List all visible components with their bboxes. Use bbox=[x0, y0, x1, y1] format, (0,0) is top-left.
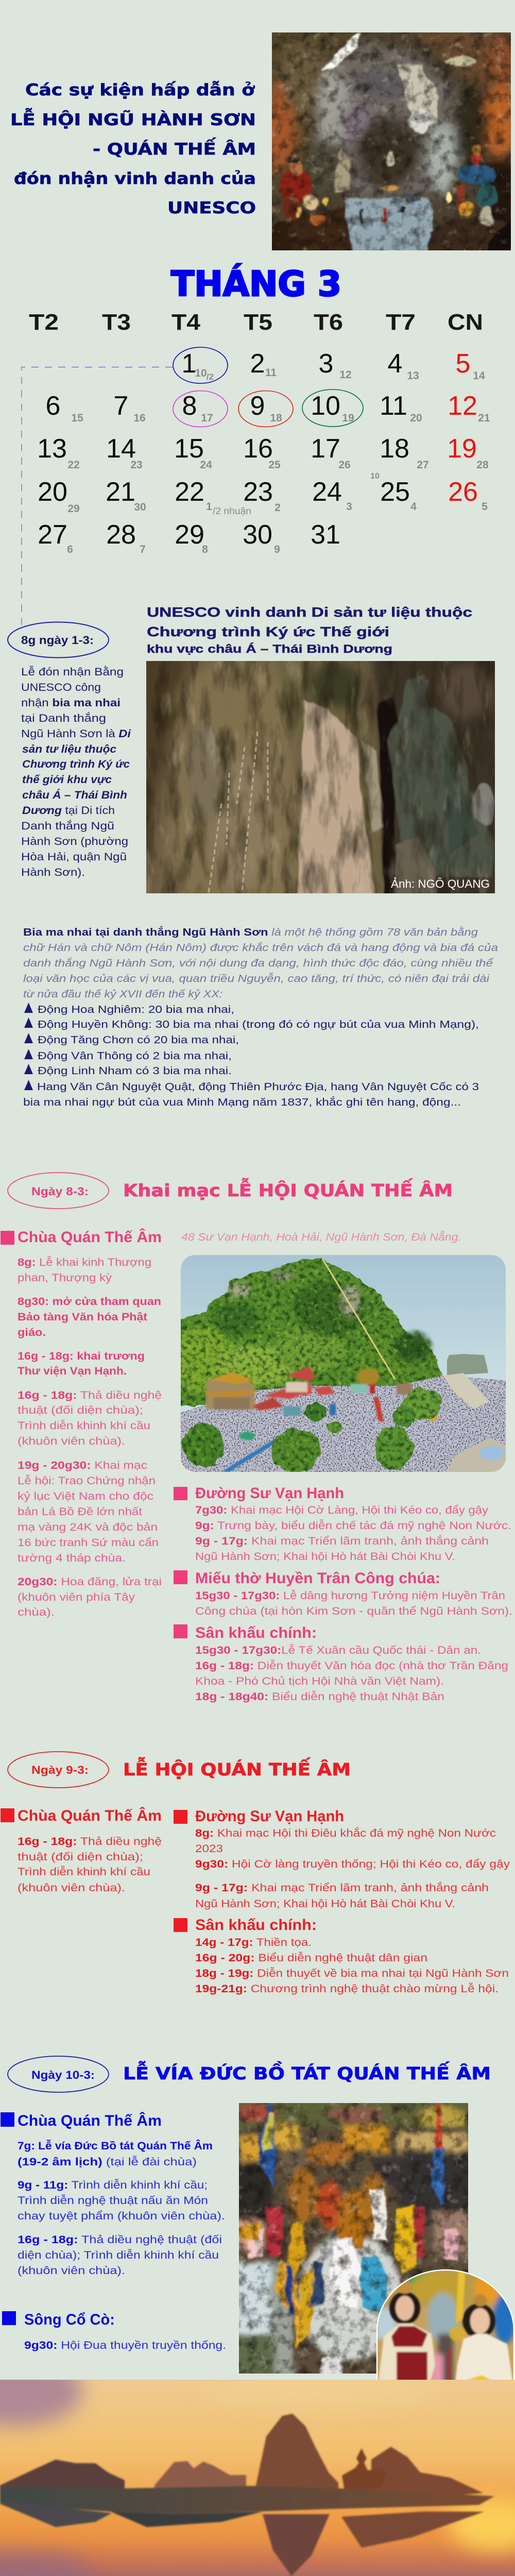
column: Chùa Quán Thế Âm: bản Lá Bồ Đề lớn nhất bbox=[18, 1506, 142, 1518]
text block: ceremony bbox=[21, 666, 131, 878]
solar dates: 9 bbox=[250, 391, 265, 421]
solar dates: 18 bbox=[380, 434, 409, 464]
panel: day 9-3 bbox=[1, 1752, 510, 1995]
weekday header bbox=[29, 310, 483, 335]
column: Chùa Quán Thế Âm: 16g - 18g: Thả diều nghệ thuật (đối bbox=[18, 2234, 222, 2246]
date badge: 8g ngày 1-3: bbox=[21, 634, 94, 647]
column: Đường Sư Vạn Hạnh and stages: 7g30: Khai mạc Hội Cờ Làng, Hội thi Kéo co, đẩy gậy bbox=[195, 1504, 489, 1516]
column: Đường Sư Vạn Hạnh and main stage: Đường Sư Vạn Hạnh bbox=[195, 1808, 344, 1825]
heading: UNESCO honours: UNESCO vinh danh Di sản tư liệu thuộc bbox=[147, 604, 472, 620]
column: Đường Sư Vạn Hạnh and main stage: 18g - 19g: Diễn thuyết về bia ma nhai tại Ngũ Hành Sơn bbox=[195, 1968, 509, 1979]
solar dates: 3 bbox=[319, 349, 333, 379]
text block: bia ma nhai description: Động Vân Thông có 2 bia ma nhai, bbox=[38, 1050, 232, 1062]
column: Chùa Quán Thế Âm: Bảo tàng Văn hóa Phật bbox=[18, 1311, 147, 1323]
column: Đường Sư Vạn Hạnh and stages: 15g30 - 17g30: Lễ Tế Xuân cầu Quốc thái - Dân an. bbox=[195, 1645, 481, 1656]
column: Chùa Quán Thế Âm: (khuôn viên chùa). bbox=[18, 1435, 125, 1447]
lunar dates bbox=[67, 367, 490, 555]
column: Đường Sư Vạn Hạnh and stages: Đường Sư Vạn Hạnh bbox=[195, 1485, 344, 1502]
lunar dates: 18 bbox=[270, 412, 282, 424]
photo: inset of two women bbox=[376, 2269, 515, 2380]
text block: bia ma nhai description: Động Linh Nham có 3 bia ma nhai. bbox=[38, 1065, 232, 1077]
heading: UNESCO honours: Chương trình Ký ức Thế giới bbox=[147, 624, 389, 639]
lunar dates: 3 bbox=[346, 501, 352, 513]
column: Đường Sư Vạn Hạnh and main stage: Sân khấu chính: bbox=[195, 1917, 317, 1934]
heading: UNESCO honours: khu vực châu Á – Thái Bình Dương bbox=[147, 642, 392, 655]
lunar dates: 27 bbox=[417, 459, 429, 471]
solar dates: 30 bbox=[243, 520, 272, 550]
column: Đường Sư Vạn Hạnh and stages: Sân khấu chính: bbox=[195, 1624, 317, 1641]
text block: bia ma nhai description: Bia ma nhai tại danh thắng Ngũ Hành Sơn là một hệ thống gồm 78 văn bản bằng bbox=[23, 926, 478, 938]
lunar dates: 11 bbox=[265, 367, 277, 379]
lunar dates: 30 bbox=[134, 501, 146, 513]
weekday header: CN bbox=[448, 310, 483, 335]
text block: ceremony: thế giới khu vực bbox=[22, 774, 112, 786]
solar dates: 17 bbox=[311, 434, 340, 464]
text block: bia ma nhai description: danh thắng Ngũ Hành Sơn, với nội dung đa dạng, hình thức độc đáo, cùng nhiều thể bbox=[23, 957, 493, 969]
photo: mountain and festival crowd bbox=[173, 1255, 511, 1477]
column: Đường Sư Vạn Hạnh and main stage: 8g: Khai mạc Hội thi Điêu khắc đá mỹ nghệ Non Nước bbox=[195, 1827, 496, 1839]
highlighted date circles bbox=[173, 347, 363, 427]
title: UNESCO bbox=[167, 199, 256, 217]
panel: 1-3 event bbox=[8, 604, 510, 909]
text block: ceremony: sản tư liệu thuộc bbox=[22, 743, 116, 755]
column: Chùa Quán Thế Âm: 19g - 20g30: Khai mạc bbox=[18, 1460, 147, 1471]
title: Các sự kiện hấp dẫn ở bbox=[25, 81, 255, 99]
solar dates: 28 bbox=[106, 520, 136, 550]
column: Chùa Quán Thế Âm: 16 bức tranh Sứ màu cẩn bbox=[18, 1537, 159, 1549]
month heading: THÁNG 3 bbox=[171, 263, 341, 304]
lunar dates: 7 bbox=[140, 544, 146, 555]
column: Chùa Quán Thế Âm: diện chùa); Trình diễn khinh khí cầu bbox=[18, 2249, 219, 2261]
text block: ceremony: Danh thắng Ngũ bbox=[21, 820, 114, 832]
column: Đường Sư Vạn Hạnh and main stage: 9g30: Hội Cờ làng truyền thống; Hội thi Kéo co, đẩy gậy bbox=[195, 1858, 510, 1870]
lunar dates: 14 bbox=[473, 370, 485, 382]
photo credit: Ảnh: NGÔ QUANG bbox=[391, 877, 490, 890]
column: Chùa Quán Thế Âm: chay tuyệt phẩm (khuôn viên chùa). bbox=[18, 2210, 225, 2222]
lunar dates: 22 bbox=[67, 459, 80, 471]
calendar bbox=[29, 310, 490, 555]
column: Đường Sư Vạn Hạnh and stages: 9g - 17g: Khai mạc Triển lãm tranh, ảnh thắng cảnh bbox=[195, 1535, 489, 1547]
text block: bia ma nhai description: từ nửa đầu thế kỷ XVII đến thế kỷ XX: bbox=[23, 989, 222, 1000]
heading: Khai mạc LỄ HỘI QUÁN THẾ ÂM bbox=[123, 1178, 453, 1200]
column: Chùa Quán Thế Âm: thuật (đối diện chùa); bbox=[18, 1404, 143, 1416]
column: Đường Sư Vạn Hạnh and stages: Ngũ Hành Sơn; Khai hội Hò hát Bài Chòi Khu V. bbox=[195, 1551, 455, 1563]
column: Chùa Quán Thế Âm: mạ vàng 24K và độc bản bbox=[18, 1521, 158, 1533]
text block: bia ma nhai description: bia ma nhai ngự bút của vua Minh Mạng năm 1837, khắc ghi tên hang, động... bbox=[23, 1096, 461, 1108]
column: Đường Sư Vạn Hạnh and main stage: 19g-21g: Chương trình nghệ thuật chào mừng Lễ hội. bbox=[195, 1983, 499, 1995]
column: Đường Sư Vạn Hạnh and stages: 15g30 - 17g30: Lễ dâng hương Tưởng niệm Huyền Trân bbox=[195, 1590, 505, 1602]
weekday header: T3 bbox=[102, 310, 131, 335]
lunar dates: 10 bbox=[370, 472, 380, 481]
text block: ceremony: Ngũ Hành Sơn là Di bbox=[21, 728, 131, 740]
text block: ceremony: Hành Sơn (phường bbox=[21, 836, 128, 848]
text block: ceremony: nhận bia ma nhai bbox=[21, 697, 121, 709]
lunar dates: 23 bbox=[130, 459, 143, 471]
date badge bbox=[8, 2056, 109, 2092]
column: Chùa Quán Thế Âm: phan, Thượng kỳ bbox=[18, 1272, 112, 1284]
column: Đường Sư Vạn Hạnh and main stage: 9g - 17g: Khai mạc Triển lãm tranh, ảnh thắng cảnh bbox=[195, 1882, 489, 1894]
solar dates: 7 bbox=[114, 391, 128, 421]
date badge: Ngày 10-3: bbox=[31, 2069, 95, 2081]
lunar dates: 24 bbox=[200, 459, 212, 471]
photo: inscribed cliff and statue bbox=[146, 661, 495, 893]
column: Chùa Quán Thế Âm: 16g - 18g: Thả diều nghệ bbox=[18, 1389, 162, 1401]
panel: day 8-3 bbox=[1, 1173, 512, 1703]
column: Chùa Quán Thế Âm: Lễ hội: Trao Chứng nhận bbox=[18, 1475, 156, 1487]
column: Sông Cổ Cò bbox=[2, 2311, 226, 2351]
lunar dates: 16 bbox=[133, 412, 146, 424]
lunar dates: 13 bbox=[407, 370, 419, 382]
lunar dates: 2 bbox=[274, 502, 281, 514]
heading: UNESCO honours bbox=[147, 604, 472, 655]
lunar dates: 26 bbox=[338, 459, 351, 471]
lunar dates: 15 bbox=[71, 412, 83, 424]
lunar dates: 21 bbox=[478, 412, 490, 424]
column: Chùa Quán Thế Âm: thuật (đối diện chùa); bbox=[18, 1851, 143, 1863]
lunar dates: 28 bbox=[476, 459, 489, 471]
lunar dates: 10 bbox=[195, 367, 207, 379]
photo: Ngũ Hành Sơn at sunset bbox=[0, 2380, 515, 2576]
weekday header: T4 bbox=[171, 310, 201, 335]
column: Chùa Quán Thế Âm bbox=[1, 2112, 225, 2277]
lunar dates: 8 bbox=[202, 544, 208, 555]
title: LỄ HỘI NGŨ HÀNH SƠN bbox=[10, 108, 256, 129]
column: Đường Sư Vạn Hạnh and stages: Miếu thờ Huyền Trân Công chúa: bbox=[195, 1570, 440, 1587]
column: Chùa Quán Thế Âm: kỷ lục Việt Nam cho độc bbox=[18, 1490, 153, 1502]
lunar dates: 29 bbox=[67, 503, 80, 515]
column: Chùa Quán Thế Âm bbox=[1, 1807, 162, 1894]
text block: bia ma nhai description: Hang Văn Cân Nguyệt Quật, động Thiên Phước Địa, hang Vân Nguyệt Cốc có 3 bbox=[37, 1081, 479, 1093]
solar dates: 16 bbox=[243, 434, 273, 464]
solar dates: 5 bbox=[456, 349, 470, 379]
lunar dates: 9 bbox=[274, 544, 280, 555]
lunar dates: 6 bbox=[67, 544, 73, 555]
column: Chùa Quán Thế Âm: Thư viện Vạn Hạnh. bbox=[18, 1365, 127, 1377]
lunar dates: 25 bbox=[268, 459, 281, 471]
solar dates: 25 bbox=[380, 477, 410, 507]
weekday header: T2 bbox=[29, 310, 59, 335]
text block: bia ma nhai description: loại văn học của các vị vua, quan triều Nguyễn, cao tăng, trí thức, có niên đại trải dài bbox=[23, 973, 490, 985]
column: Đường Sư Vạn Hạnh and stages: 9g: Trưng bày, biểu diễn chế tác đá mỹ nghệ Non Nước. bbox=[195, 1520, 511, 1532]
solar dates: 14 bbox=[106, 434, 136, 464]
column: Đường Sư Vạn Hạnh and stages: 18g - 18g40: Biểu diễn nghệ thuật Nhật Bản bbox=[195, 1691, 444, 1703]
column: Chùa Quán Thế Âm: 9g - 11g: Trình diễn khinh khí cầu; bbox=[18, 2179, 208, 2191]
column: Chùa Quán Thế Âm: (khuôn viên phía Tây bbox=[18, 1591, 135, 1603]
column: Đường Sư Vạn Hạnh and stages: 16g - 18g: Diễn thuyết Văn hóa đọc (nhà thơ Trần Đăng bbox=[195, 1660, 508, 1672]
text block: ceremony: Hành Sơn). bbox=[21, 867, 85, 878]
column: Chùa Quán Thế Âm: chùa). bbox=[18, 1606, 55, 1618]
solar dates: 19 bbox=[447, 434, 477, 464]
date badge bbox=[8, 1173, 109, 1209]
text block: ceremony: Dương tại Di tích bbox=[22, 805, 115, 817]
solar dates: 10 bbox=[311, 391, 340, 421]
title: đón nhận vinh danh của bbox=[14, 170, 256, 188]
column: Chùa Quán Thế Âm: Chùa Quán Thế Âm bbox=[18, 2112, 162, 2129]
solar dates bbox=[37, 349, 478, 550]
text block: ceremony: châu Á – Thái Bình bbox=[22, 789, 127, 801]
lunar dates: 20 bbox=[410, 412, 422, 424]
column: Đường Sư Vạn Hạnh and stages: Công chúa (tại hòn Kim Sơn - quần thể Ngũ Hành Sơn). bbox=[195, 1605, 512, 1617]
photo: cave interior bbox=[272, 32, 511, 250]
column: Chùa Quán Thế Âm: 16g - 18g: khai trương bbox=[18, 1350, 145, 1362]
solar dates: 20 bbox=[38, 477, 67, 507]
heading: LỄ VÍA ĐỨC BỒ TÁT QUÁN THẾ ÂM bbox=[123, 2061, 491, 2083]
column: Chùa Quán Thế Âm: Trình diễn khinh khí cầu bbox=[18, 1420, 150, 1432]
column: Chùa Quán Thế Âm: giáo. bbox=[18, 1327, 46, 1338]
solar dates: 4 bbox=[388, 349, 402, 379]
text block: ceremony: Lễ đón nhận Bằng bbox=[21, 666, 124, 678]
lunar dates: /2 nhuận bbox=[213, 506, 251, 516]
column: Chùa Quán Thế Âm: tường 4 tháp chùa. bbox=[18, 1552, 126, 1564]
column: Đường Sư Vạn Hạnh and main stage bbox=[174, 1808, 510, 1995]
text block: bia ma nhai description: Động Hoa Nghiêm: 20 bia ma nhai, bbox=[38, 1004, 234, 1015]
lunar dates: 19 bbox=[342, 412, 354, 424]
lunar dates: 17 bbox=[201, 412, 213, 424]
solar dates: 31 bbox=[311, 520, 340, 550]
text block: bia ma nhai description: Động Tăng Chơn có 20 bia ma nhai, bbox=[38, 1035, 239, 1046]
panel: day 10-3 bbox=[1, 2056, 515, 2380]
column: Chùa Quán Thế Âm: 8g30: mở cửa tham quan bbox=[18, 1296, 161, 1308]
column: Chùa Quán Thế Âm: (khuôn viên chùa). bbox=[18, 1882, 125, 1894]
column: Chùa Quán Thế Âm bbox=[1, 1228, 162, 1618]
date badge bbox=[8, 1752, 109, 1788]
column: Chùa Quán Thế Âm: 7g: Lễ vía Đức Bồ tát Quán Thế Âm bbox=[18, 2140, 213, 2152]
text block: ceremony: Hòa Hải, quận Ngũ bbox=[21, 851, 127, 863]
lunar dates: 4 bbox=[410, 501, 417, 513]
solar dates: 12 bbox=[448, 391, 477, 421]
solar dates: 24 bbox=[312, 477, 342, 507]
date badge: Ngày 9-3: bbox=[31, 1764, 89, 1776]
title: - QUÁN THẾ ÂM bbox=[93, 138, 256, 159]
text block: ceremony: UNESCO công bbox=[21, 682, 101, 693]
date badge: Ngày 8-3: bbox=[31, 1185, 89, 1198]
column: Sông Cổ Cò: 9g30: Hội Đua thuyền truyền thống. bbox=[24, 2340, 226, 2351]
solar dates: 6 bbox=[46, 391, 60, 421]
solar dates: 29 bbox=[175, 520, 204, 550]
weekday header: T6 bbox=[314, 310, 343, 335]
solar dates: 23 bbox=[243, 477, 273, 507]
column: Chùa Quán Thế Âm: Chùa Quán Thế Âm bbox=[18, 1228, 162, 1246]
photo: procession bbox=[239, 2103, 468, 2374]
weekday header: T7 bbox=[386, 310, 416, 335]
column: Đường Sư Vạn Hạnh and main stage: 14g - 17g: Thiền tọa. bbox=[195, 1937, 312, 1948]
lunar dates: /2 bbox=[207, 372, 214, 382]
weekday header: T5 bbox=[244, 310, 272, 335]
column: Sông Cổ Cò: Sông Cổ Cò: bbox=[24, 2311, 115, 2328]
solar dates: 22 bbox=[175, 477, 204, 507]
solar dates: 15 bbox=[174, 434, 204, 464]
column: Chùa Quán Thế Âm: Trình diễn nghệ thuật nấu ăn Món bbox=[18, 2195, 208, 2207]
column: Đường Sư Vạn Hạnh and stages bbox=[174, 1485, 512, 1703]
column: Chùa Quán Thế Âm: (khuôn viên chùa). bbox=[18, 2265, 125, 2277]
lunar dates: 1 bbox=[206, 501, 212, 513]
lunar dates: 12 bbox=[339, 369, 352, 381]
text block: bia ma nhai description: Động Huyền Không: 30 bia ma nhai (trong đó có ngự bút của vua Minh Mạng), bbox=[38, 1019, 479, 1030]
text block: bia ma nhai description: chữ Hán và chữ Nôm (Hán Nôm) được khắc trên vách đá và hang động và bia đá của bbox=[23, 942, 498, 954]
solar dates: 8 bbox=[182, 391, 197, 421]
address: 48 Sư Vạn Hạnh, Hoà Hải, Ngũ Hành Sơn, Đà Nẵng. bbox=[181, 1231, 461, 1243]
solar dates: 11 bbox=[380, 391, 407, 421]
column: Đường Sư Vạn Hạnh and stages: Khoa - Phó Chủ tịch Hội Nhà văn Việt Nam). bbox=[195, 1675, 444, 1687]
column: Chùa Quán Thế Âm: Chùa Quán Thế Âm bbox=[18, 1807, 162, 1824]
solar dates: 21 bbox=[106, 477, 135, 507]
solar dates: 1 bbox=[182, 349, 196, 379]
solar dates: 27 bbox=[38, 520, 67, 550]
text block: ceremony: Chương trình Ký ức bbox=[22, 758, 130, 770]
text block: bia ma nhai description bbox=[23, 926, 498, 1108]
column: Chùa Quán Thế Âm: 16g - 18g: Thả diều nghệ bbox=[18, 1836, 162, 1848]
solar dates: 2 bbox=[250, 349, 265, 379]
solar dates: 13 bbox=[37, 434, 67, 464]
column: Chùa Quán Thế Âm: (19-2 âm lịch) (tại lễ đài chùa) bbox=[18, 2156, 197, 2168]
column: Đường Sư Vạn Hạnh and main stage: 2023 bbox=[195, 1843, 223, 1855]
title bbox=[10, 81, 256, 217]
heading: LỄ HỘI QUÁN THẾ ÂM bbox=[123, 1757, 351, 1780]
column: Đường Sư Vạn Hạnh and main stage: 16g - 20g: Biểu diễn nghệ thuật dân gian bbox=[195, 1952, 427, 1964]
lunar dates: 5 bbox=[482, 501, 488, 513]
text block: ceremony: tại Danh thắng bbox=[21, 713, 106, 724]
column: Chùa Quán Thế Âm: 20g30: Hoa đăng, lửa trại bbox=[18, 1576, 162, 1588]
column: Chùa Quán Thế Âm: 8g: Lễ khai kinh Thượng bbox=[18, 1257, 151, 1268]
column: Chùa Quán Thế Âm: Trình diễn khinh khí cầu bbox=[18, 1866, 150, 1878]
dashed connector arrow bbox=[22, 367, 173, 625]
solar dates: 26 bbox=[448, 477, 478, 507]
date badge bbox=[8, 622, 109, 657]
column: Đường Sư Vạn Hạnh and main stage: Ngũ Hành Sơn; Khai hội Hò hát Bài Chòi Khu V. bbox=[195, 1898, 455, 1910]
